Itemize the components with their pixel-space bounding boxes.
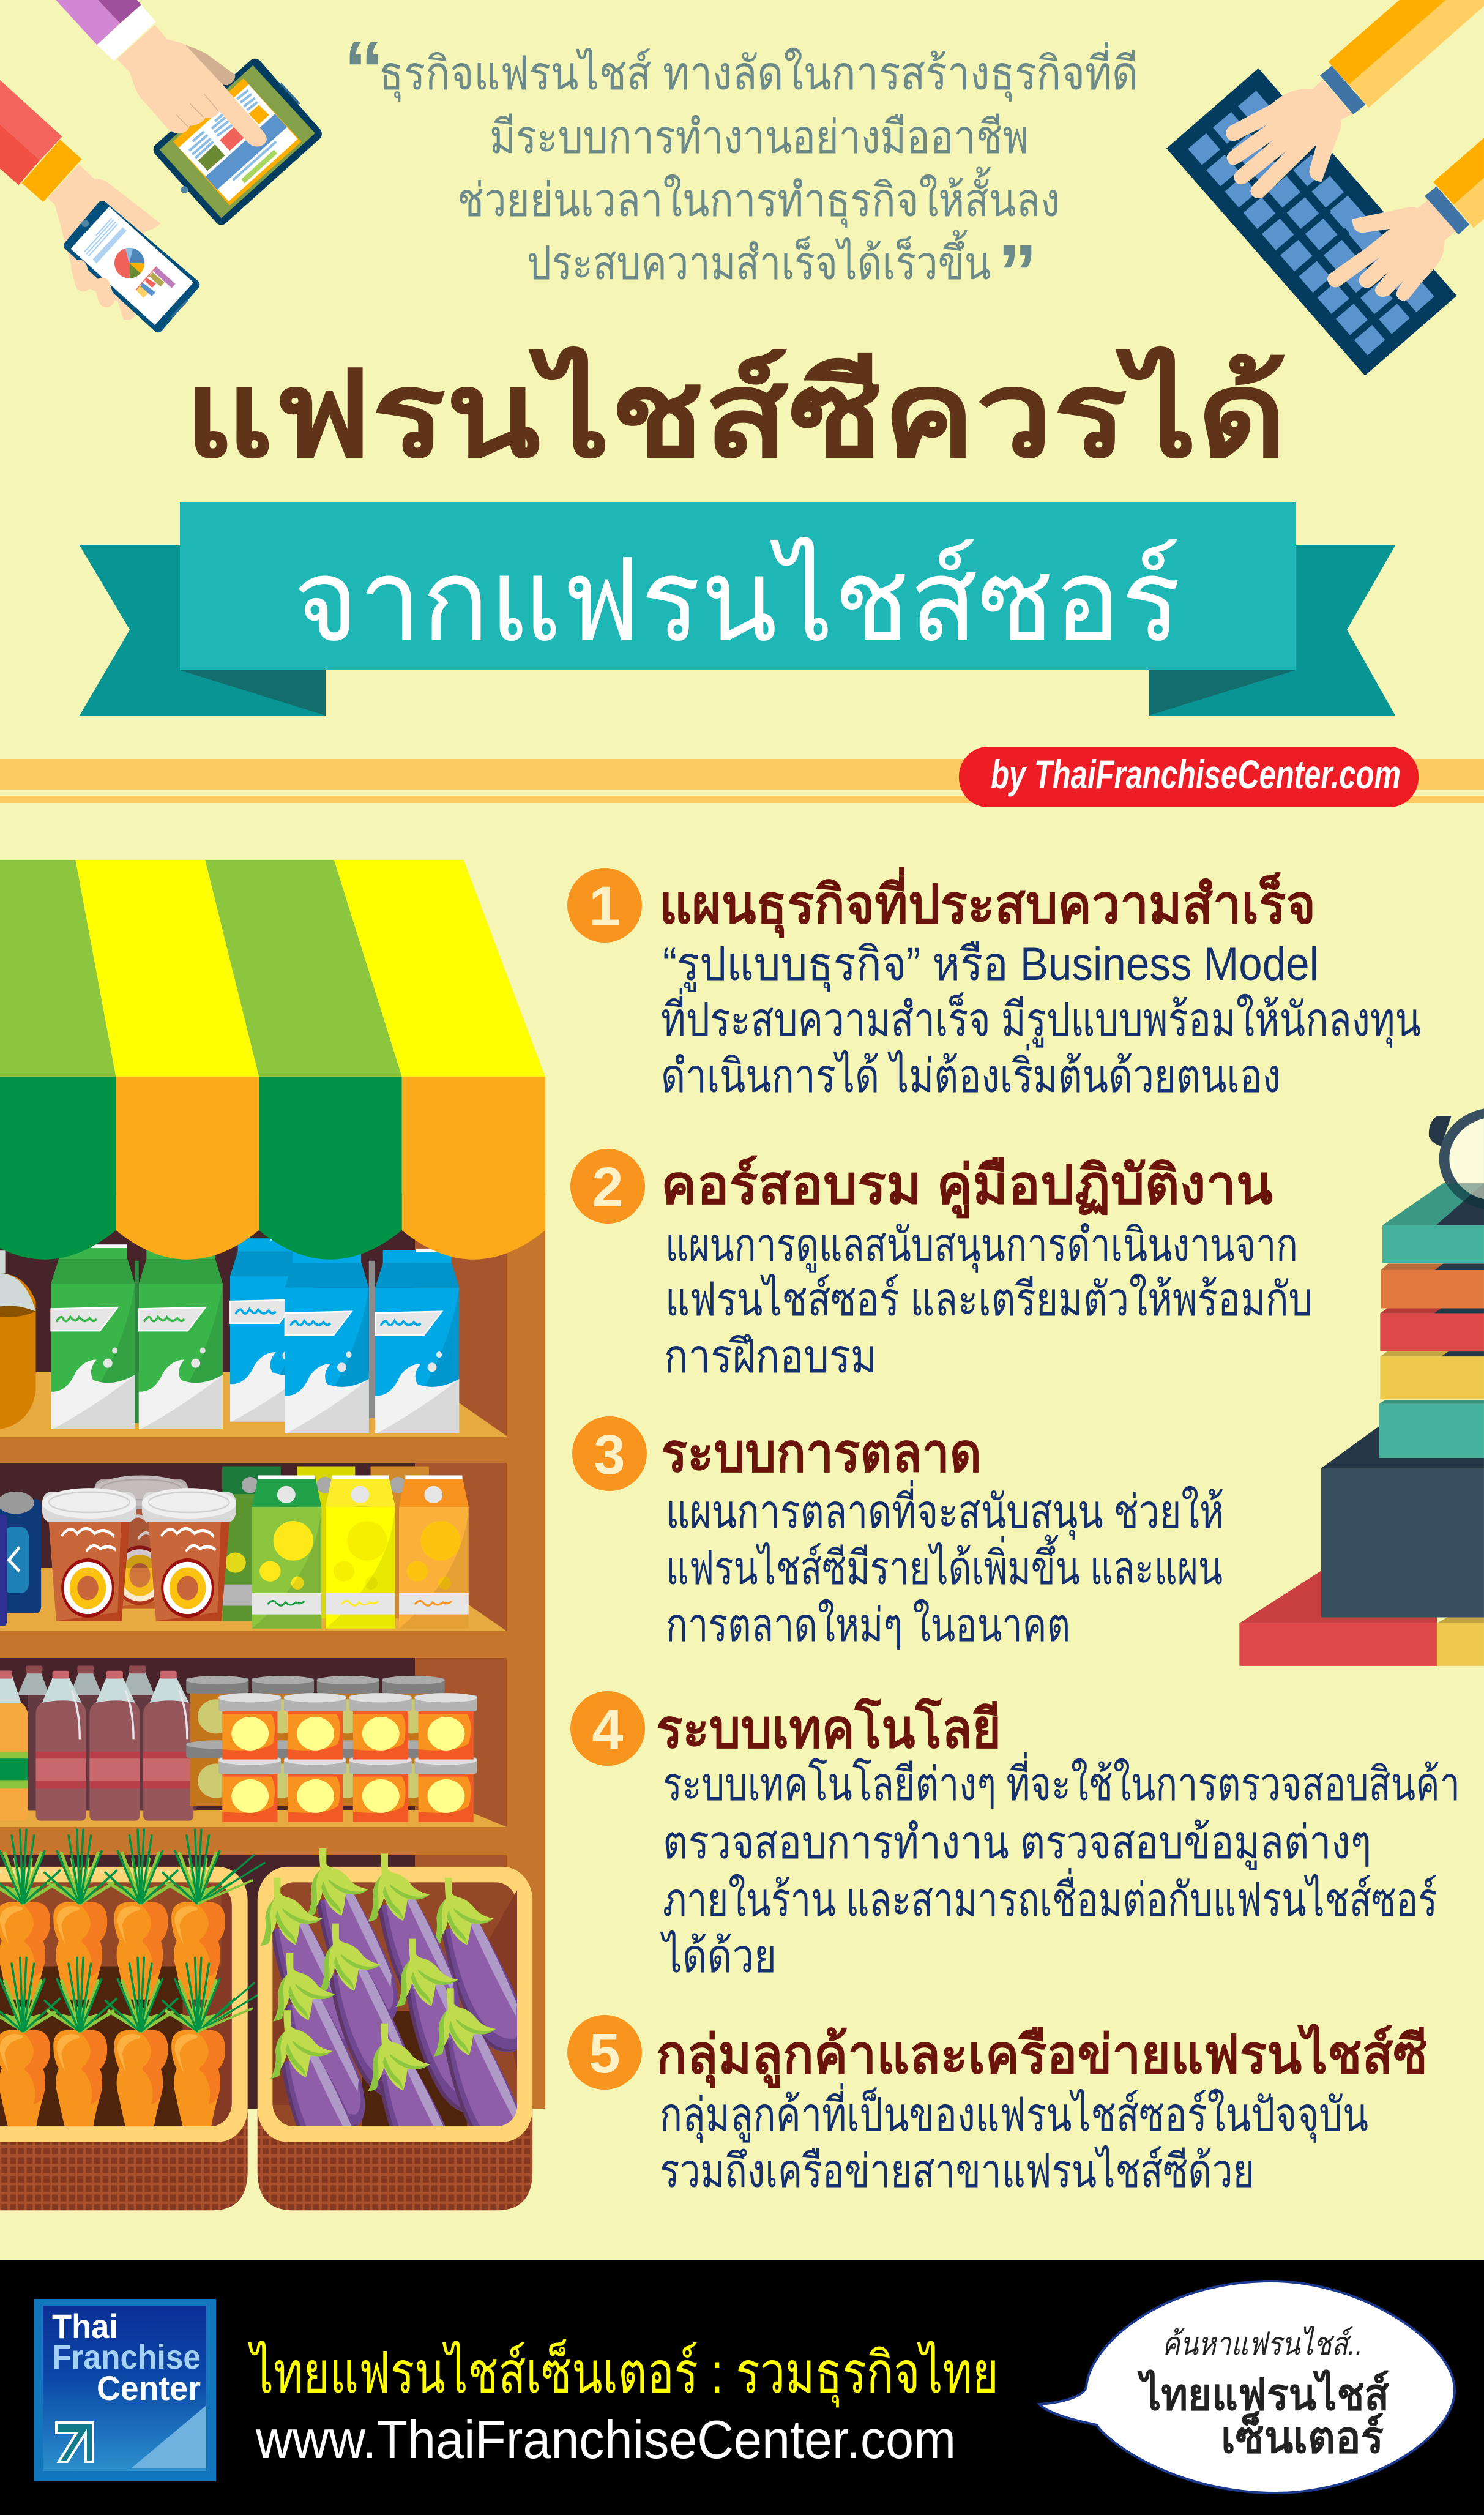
illustration: hand holding tablet [56, 0, 315, 218]
item 1 heading: แผนธุรกิจที่ประสบความสำเร็จ [659, 867, 1316, 938]
illustration: hands on keyboard [1166, 0, 1484, 376]
quote text [344, 24, 1138, 317]
eggplants [260, 1848, 526, 2198]
quote text: ธุรกิจแฟรนไชส์ ทางลัดในการสร้างธุรกิจที่ดี [379, 42, 1138, 102]
item 5 body: รวมถึงเครือข่ายสาขาแฟรนไชส์ซีด้วย [660, 2145, 1255, 2197]
shelf 1 products [0, 1237, 459, 1433]
shop illustration [0, 860, 545, 2210]
quote mark close: ” [997, 228, 1037, 317]
quote text: ประสบความสำเร็จได้เร็วขึ้น [527, 230, 991, 290]
bottle on shelf 1 [0, 1250, 36, 1429]
number badge 1: 1 [589, 875, 621, 938]
speech bubble: ค้นหาแฟรนไชส์.. [1162, 2326, 1363, 2362]
logo [34, 2299, 216, 2481]
ribbon banner [80, 502, 1395, 716]
quote text: ช่วยย่นเวลาในการทำธุรกิจให้สั้นลง [457, 166, 1060, 228]
item 4 body: ได้ด้วย [660, 1930, 777, 1982]
logo: Franchise [52, 2337, 201, 2376]
illustration: hand holding phone [0, 80, 195, 328]
footer url: www.ThaiFranchiseCenter.com [255, 2409, 956, 2470]
footer tagline: ไทยแฟรนไชส์เซ็นเตอร์ : รวมธุรกิจไทย [248, 2339, 999, 2408]
book stack [1239, 1183, 1484, 1666]
banner heading: จากแฟรนไชส์ซอร์ [293, 536, 1181, 665]
item 1 body: “รูปแบบธุรกิจ” หรือ Business Model [663, 938, 1319, 992]
number badge 3: 3 [594, 1424, 625, 1486]
number badge 2 [570, 1149, 645, 1224]
item 2 body: แผนการดูแลสนับสนุนการดำเนินงานจาก [665, 1219, 1298, 1273]
logo: Thai [52, 2307, 118, 2345]
number badge 1 [567, 868, 642, 943]
juice cartons [252, 1475, 469, 1629]
quote text: มีระบบการทำงานอย่างมืออาชีพ [490, 111, 1029, 163]
basket: carrots [0, 1829, 264, 2210]
item 4 body: ตรวจสอบการทำงาน ตรวจสอบข้อมูลต่างๆ [663, 1817, 1371, 1870]
back juice cartons [222, 1467, 429, 1621]
number badge 5: 5 [589, 2022, 621, 2085]
item 3 heading: ระบบการตลาด [661, 1422, 982, 1483]
item 1 [567, 867, 1421, 1102]
item 2 body [664, 1219, 1313, 1383]
byline pill [959, 747, 1419, 807]
item 1 body: ดำเนินการได้ ไม่ต้องเริ่มต้นด้วยตนเอง [661, 1044, 1281, 1102]
item 3 body: แผนการตลาดที่จะสนับสนุน ช่วยให้ [666, 1480, 1224, 1540]
awning [0, 860, 545, 1260]
cans [0, 1492, 41, 1626]
speech bubble: ไทยแฟรนไชส์ [1137, 2369, 1389, 2420]
blue milk cartons [230, 1237, 459, 1433]
orange bottle [0, 1671, 28, 1821]
number badge 5 [567, 2015, 642, 2090]
glasses [1429, 1108, 1484, 1210]
item 1 body [661, 938, 1421, 1102]
speech bubble [1039, 2281, 1455, 2493]
item 3 body: การตลาดใหม่ๆ ในอนาคต [666, 1599, 1070, 1651]
item 4 body [660, 1752, 1460, 1982]
speech bubble: เซ็นเตอร์ [1221, 2411, 1384, 2462]
number badge 4: 4 [592, 1698, 624, 1761]
title: แฟรนไชส์ซีควรได้ [184, 346, 1287, 482]
basket: eggplants base [258, 1867, 532, 2210]
item 5 body [660, 2083, 1368, 2197]
back cans [186, 1676, 445, 1806]
item 4 heading: ระบบเทคโนโลยี [656, 1698, 1001, 1759]
front cans [218, 1693, 477, 1822]
item 5 heading: กลุ่มลูกค้าและเครือข่ายแฟรนไชส์ซี [656, 2024, 1428, 2088]
item 2 body: การฝึกอบรม [664, 1331, 877, 1383]
green milk cartons [51, 1244, 223, 1429]
back cup [94, 1475, 188, 1609]
item 3 body: แฟรนไชส์ซีมีรายได้เพิ่มขึ้น และแผน [666, 1534, 1223, 1594]
logo: Center [97, 2369, 201, 2407]
footer [0, 2260, 1484, 2515]
item 4 [570, 1691, 1460, 1982]
red bottles [36, 1671, 193, 1821]
back bottles [18, 1665, 196, 1810]
item 2 heading: คอร์สอบรม คู่มือปฏิบัติงาน [661, 1154, 1273, 1219]
number badge 3 [572, 1416, 647, 1491]
item 3 body [666, 1480, 1224, 1651]
item 3 [572, 1416, 1224, 1651]
shelf 3 products [0, 1665, 477, 1822]
item 5 [567, 2015, 1428, 2197]
item 2 body: แฟรนไชส์ซอร์ และเตรียมตัวให้พร้อมกับ [665, 1273, 1313, 1326]
quote mark open: “ [344, 24, 384, 114]
shop structure [0, 1194, 545, 2109]
number badge 4 [570, 1691, 645, 1766]
number badge 2: 2 [592, 1156, 624, 1219]
cups [42, 1488, 236, 1621]
shelf 2 products [0, 1467, 469, 1629]
books and glasses illustration [1239, 1108, 1484, 1666]
item 2 [570, 1149, 1313, 1383]
